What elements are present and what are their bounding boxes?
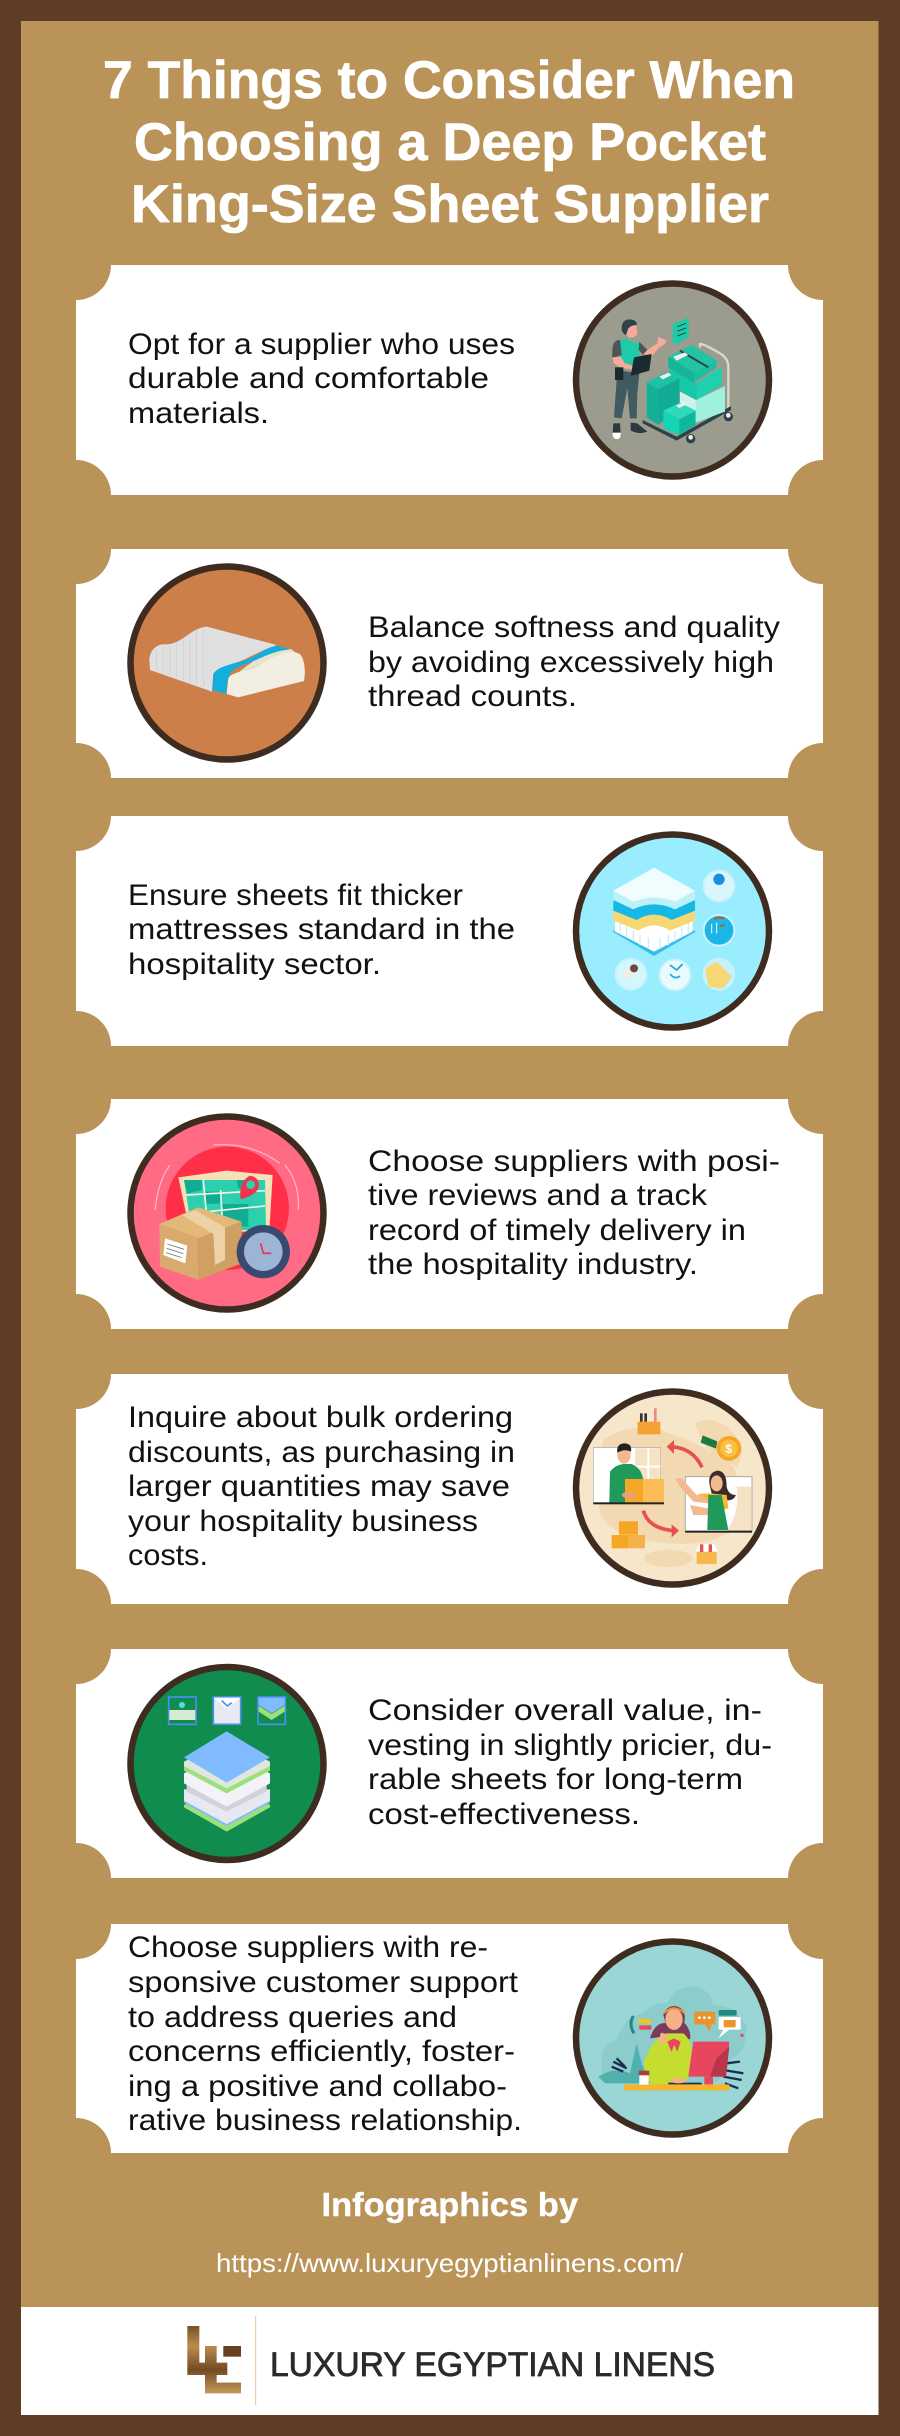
title: Choosing a Deep Pocket: [134, 113, 766, 172]
icon: parcel, map and clock: [130, 1116, 324, 1310]
panel: card 3 fit thicker mattresses: [76, 816, 823, 1046]
text block: vesting in slightly pricier, du-: [368, 1729, 772, 1762]
footer logo band: [21, 2307, 878, 2415]
text block: sponsive customer support: [128, 1966, 519, 1999]
text block: costs.: [128, 1539, 208, 1572]
text block: [128, 1931, 522, 2137]
text block: [368, 611, 780, 713]
text block: concerns efficiently, foster-: [128, 2035, 515, 2068]
icon: contour pillow: [130, 566, 324, 760]
text block: Choose suppliers with posi-: [368, 1145, 780, 1178]
text block: rative business relationship.: [128, 2104, 522, 2137]
panel: card 1 durable materials: [76, 265, 823, 495]
panel: card 6 overall value: [76, 1649, 823, 1878]
card shape: [76, 816, 823, 1046]
icon: worker with boxes on cart: [576, 284, 769, 476]
text block: ing a positive and collabo-: [128, 2070, 507, 2103]
text block: Choose suppliers with re-: [128, 1931, 488, 1964]
panel: card 5 bulk ordering: [76, 1374, 823, 1604]
text block: mattresses standard in the: [128, 913, 515, 946]
text block: the hospitality industry.: [368, 1248, 698, 1281]
logo wordmark: LUXURY EGYPTIAN LINENS: [270, 2346, 715, 2384]
icon: stacked mattress: [130, 1667, 324, 1860]
text block: to address queries and: [128, 2001, 457, 2034]
icon: support agent at desk: [576, 1942, 769, 2134]
panel: card 7 customer support: [76, 1924, 823, 2153]
card shape: [76, 1374, 823, 1604]
text block: Consider overall value, in-: [368, 1694, 762, 1727]
text block: [368, 1145, 780, 1281]
card shape: [76, 1649, 823, 1878]
icon: mattress layers: [576, 834, 769, 1028]
card shape: [76, 1924, 823, 2153]
text block: your hospitality business: [128, 1505, 478, 1538]
text block: [128, 1401, 515, 1572]
card shape: [76, 1099, 823, 1329]
text block: [128, 879, 515, 981]
card shape: [76, 265, 823, 495]
text block: tive reviews and a track: [368, 1179, 708, 1212]
text block: [368, 1694, 772, 1831]
logo divider: [255, 2316, 256, 2405]
panel: card 4 reviews and timely delivery: [76, 1099, 823, 1329]
panel: card 2 softness and quality: [76, 549, 823, 778]
text block: thread counts.: [368, 680, 577, 713]
text block: larger quantities may save: [128, 1470, 510, 1503]
text block: record of timely delivery in: [368, 1214, 746, 1247]
credit heading: Infographics by: [322, 2186, 579, 2223]
text block: hospitality sector.: [128, 948, 381, 981]
text block: cost-effectiveness.: [368, 1798, 640, 1831]
text block: durable and comfortable: [128, 362, 489, 395]
title: 7 Things to Consider When: [103, 51, 795, 110]
text block: Balance softness and quality: [368, 611, 780, 644]
text block: Opt for a supplier who uses: [128, 328, 515, 361]
logo mark: [187, 2326, 241, 2393]
text block: by avoiding excessively high: [368, 646, 774, 679]
icon: supplier and buyer exchange: [576, 1392, 769, 1584]
website url: https://www.luxuryegyptianlinens.com/: [216, 2248, 684, 2278]
text block: Inquire about bulk ordering: [128, 1401, 513, 1434]
text block: Ensure sheets fit thicker: [128, 879, 463, 912]
card shape: [76, 549, 823, 778]
icon: supplier and buyer exchange: $: [725, 1442, 732, 1456]
text block: materials.: [128, 397, 269, 430]
text block: rable sheets for long-term: [368, 1763, 743, 1796]
text block: [128, 328, 515, 430]
text block: discounts, as purchasing in: [128, 1436, 515, 1469]
title: [103, 51, 795, 234]
title: King-Size Sheet Supplier: [131, 175, 769, 234]
